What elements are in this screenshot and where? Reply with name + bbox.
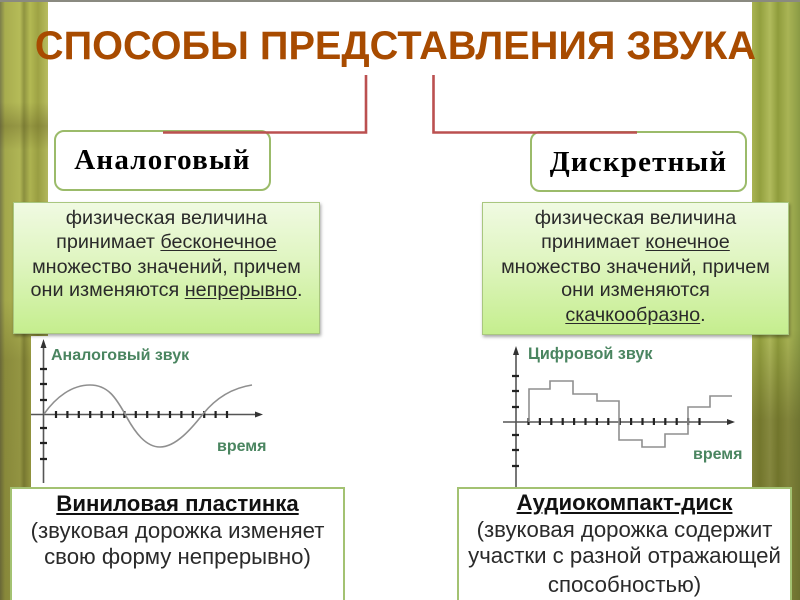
- panel: analog definition: [13, 202, 320, 334]
- line 3: множество значений, причем: [501, 256, 770, 278]
- top edge line: [0, 0, 800, 2]
- line 4: они изменяются: [561, 279, 710, 301]
- panel: vinyl record: [10, 487, 345, 600]
- ticks: [40, 369, 227, 459]
- panel: discrete definition: [482, 202, 789, 335]
- line 2: участки с разной отражающей: [468, 543, 781, 568]
- chart: digital sound: [500, 336, 750, 488]
- line 2: принимает бесконечное: [56, 231, 277, 253]
- decorative band: left: [0, 0, 48, 600]
- title: СПОСОБЫ ПРЕДСТАВЛЕНИЯ ЗВУКА: [35, 24, 756, 68]
- line 2: принимает конечное: [541, 231, 730, 253]
- axes: [503, 346, 735, 488]
- panel: audio CD: [457, 487, 792, 600]
- line 1: (звуковая дорожка содержит: [477, 517, 772, 542]
- decorative band: right: [752, 0, 800, 600]
- line 5: скачкообразно.: [565, 304, 706, 326]
- box: analog heading: [54, 130, 271, 191]
- line 4: они изменяются непрерывно.: [31, 279, 302, 301]
- line 3: множество значений, причем: [32, 256, 301, 278]
- ticks: [512, 376, 700, 466]
- chart title: Цифровой звук: [528, 345, 653, 363]
- heading: Виниловая пластинка: [56, 491, 299, 516]
- heading: Аудиокомпакт-диск: [517, 490, 732, 515]
- box: discrete heading: [530, 131, 747, 192]
- axis label: время: [217, 438, 266, 455]
- line 1: физическая величина: [535, 207, 736, 229]
- box: analog heading: Аналоговый: [74, 144, 251, 176]
- analog curve: [44, 385, 252, 447]
- line 3: способностью): [548, 572, 701, 597]
- digital step line: [529, 381, 732, 447]
- line 1: физическая величина: [66, 207, 267, 229]
- line 1: (звуковая дорожка изменяет: [31, 518, 324, 543]
- connector: right: [432, 75, 637, 134]
- axes: [31, 339, 263, 483]
- line 2: свою форму непрерывно): [44, 544, 311, 569]
- chart: analog sound: [31, 336, 301, 488]
- connector: left: [163, 75, 368, 134]
- chart title: Аналоговый звук: [51, 347, 190, 364]
- box: discrete heading: Дискретный: [550, 146, 727, 178]
- axis label: время: [693, 446, 742, 463]
